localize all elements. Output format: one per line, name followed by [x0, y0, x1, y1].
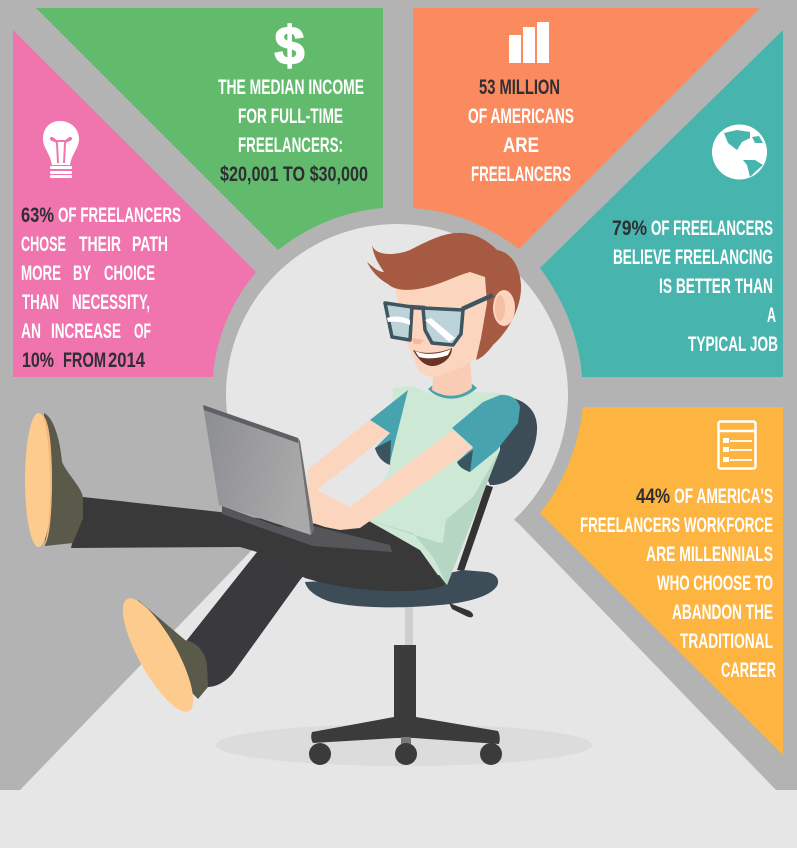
hair — [367, 233, 521, 360]
63 percent text: INCREASE — [51, 320, 121, 343]
neck — [432, 355, 472, 396]
icon: checklist — [718, 422, 756, 468]
79 percent text — [612, 217, 778, 356]
53 million text: ARE — [503, 134, 539, 157]
panel: median income — [36, 8, 383, 250]
79 percent text: 79% — [612, 217, 647, 240]
glasses — [385, 295, 493, 345]
79 percent text: A — [767, 304, 776, 327]
median income text: FOR FULL-TIME — [238, 105, 343, 128]
chair base — [309, 717, 502, 765]
63 percent text: NECESSITY, — [72, 291, 150, 314]
63 percent text: 2014 — [108, 349, 145, 372]
44 percent text: 44% — [636, 485, 670, 508]
chair lever — [449, 603, 473, 617]
63 percent text: PATH — [132, 233, 168, 256]
nose — [412, 338, 424, 344]
icon: bar chart — [509, 22, 549, 63]
ground shadow — [216, 724, 592, 766]
far leg — [187, 525, 330, 687]
t-shirt — [367, 386, 500, 585]
shoe 2 — [110, 590, 208, 720]
icon: light bulb — [43, 121, 79, 178]
panel: 44 percent — [540, 407, 783, 755]
63 percent text: CHOSE — [21, 233, 66, 256]
icon: globe — [712, 124, 767, 180]
floor and central circle — [20, 224, 776, 790]
median income text: FREELANCERS: — [238, 134, 343, 157]
63 percent text: THAN — [22, 291, 59, 314]
63 percent text: BY — [73, 262, 91, 285]
53 million text — [468, 76, 574, 186]
office chair — [305, 398, 537, 765]
ear — [493, 290, 515, 326]
53 million text: OF AMERICANS — [468, 105, 574, 128]
63 percent text: CHOICE — [104, 262, 155, 285]
near leg and torso bottom — [71, 497, 445, 591]
sleeves — [370, 390, 520, 472]
icon: dollar sign: $ — [274, 16, 305, 76]
63 percent text: OF — [134, 320, 151, 343]
median income text — [218, 76, 368, 186]
63 percent text: 63% — [21, 204, 54, 227]
44 percent text — [580, 485, 776, 682]
chair seat — [305, 570, 498, 607]
63 percent text: AN — [21, 320, 41, 343]
63 percent text: MORE — [21, 262, 61, 285]
laptop screen — [203, 405, 314, 535]
person — [25, 233, 521, 720]
53 million text: FREELANCERS — [471, 163, 571, 186]
63 percent text: 10% — [22, 349, 54, 372]
arms and hands — [307, 420, 473, 530]
panel: 53 million — [413, 8, 760, 249]
chair piston — [405, 606, 413, 648]
median income text: THE MEDIAN INCOME — [218, 76, 364, 99]
63 percent text: FROM — [63, 349, 106, 372]
median income text: $20,001 TO $30,000 — [220, 163, 368, 186]
collar — [428, 384, 477, 399]
63 percent text — [21, 204, 181, 372]
face — [395, 268, 489, 378]
chair backrest — [457, 398, 537, 571]
laptop keyboard base — [222, 506, 392, 552]
63 percent text: THEIR — [79, 233, 121, 256]
mouth — [413, 348, 452, 366]
panel: 79 percent — [540, 30, 783, 377]
shoe 1 — [25, 413, 83, 547]
panel: 63 percent — [13, 30, 256, 377]
53 million text: 53 MILLION — [479, 76, 560, 99]
63 percent text: OF FREELANCERS — [58, 204, 181, 227]
